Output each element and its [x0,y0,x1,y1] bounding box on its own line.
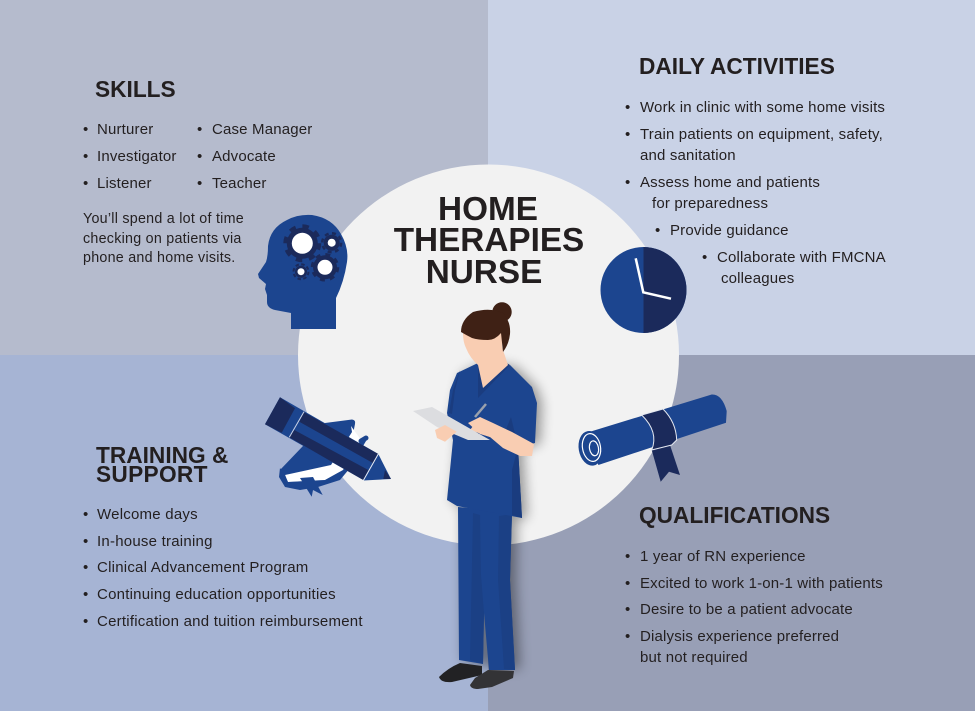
icon: clock [600,247,686,333]
training list: Welcome days [97,506,198,523]
title: NURSE [426,254,542,291]
training list: • [83,613,88,630]
title [394,191,584,291]
qualifications list: 1 year of RN experience [640,548,806,565]
panel: training background [0,355,488,711]
daily activities list [625,99,886,287]
book lower cover [279,440,366,490]
qualifications list: • [625,575,630,592]
training list: • [83,559,88,576]
training list: • [83,533,88,550]
heading: training and support: TRAINING & [96,442,228,468]
daily activities list: Provide guidance [670,222,789,239]
training list: Certification and tuition reimbursement [97,613,363,630]
qualifications list: • [625,628,630,645]
skills description [83,211,244,266]
skills list: Teacher [212,175,267,192]
panel: qualifications background [488,355,975,711]
arm [470,417,534,456]
training list: Continuing education opportunities [97,586,336,603]
panel: daily activities background [488,0,975,355]
qualifications list: • [625,548,630,565]
skills list: • [197,148,202,165]
skills list: Case Manager [212,121,312,138]
skills list: • [83,121,88,138]
daily activities list: • [655,222,660,239]
skills list: Investigator [97,148,177,165]
book ribbon [300,477,323,497]
skills list: Nurturer [97,121,153,138]
clipboard [413,407,490,440]
title: HOME [438,191,538,228]
icon: head with gears [258,215,347,329]
qualifications list: • [625,601,630,618]
daily activities list: • [625,174,630,191]
daily activities list: Collaborate with FMCNA [717,249,886,266]
book bookmark tip [361,438,366,441]
daily activities list: Train patients on equipment, safety, [640,126,883,143]
training list: In-house training [97,533,213,550]
qualifications list [625,548,883,666]
daily activities list: Assess home and patients [640,174,820,191]
daily activities list: colleagues [721,270,794,287]
panel text: daily activities [625,53,886,287]
skills list: Advocate [212,148,276,165]
skills list: Listener [97,175,152,192]
daily activities list: • [625,126,630,143]
skills list: • [197,175,202,192]
center circle [298,164,679,546]
nurse shadow [452,364,542,669]
daily activities list: for preparedness [652,195,768,212]
skills description: checking on patients via [83,231,242,247]
heading: qualifications: QUALIFICATIONS [639,502,830,528]
writing hand [468,417,490,437]
icon: book and pencil [265,397,391,497]
daily activities list: Work in clinic with some home visits [640,99,885,116]
skills list: • [197,121,202,138]
skills description: You’ll spend a lot of time [83,211,244,227]
scrub top [447,362,537,518]
training list: • [83,586,88,603]
training list [83,506,363,630]
icon: diploma scroll [576,394,727,482]
hair [461,302,512,352]
neck and face [463,325,508,388]
skills list: • [83,148,88,165]
qualifications list: but not required [640,649,748,666]
panel text: qualifications [625,502,883,666]
trousers [458,507,515,670]
heading: training and support: SUPPORT [96,461,208,487]
skills list [83,121,312,192]
panel text: training and support [83,442,363,630]
panel text: skills [83,76,312,266]
panel: skills background [0,0,488,355]
training list: Clinical Advancement Program [97,559,309,576]
shoes [439,663,514,689]
book cover [280,420,355,477]
qualifications list: Desire to be a patient advocate [640,601,853,618]
title: THERAPIES [394,222,584,259]
daily activities list: and sanitation [640,147,736,164]
heading: daily activities: DAILY ACTIVITIES [639,53,835,79]
nurse figure [413,302,542,689]
daily activities list: • [625,99,630,116]
skills list: • [83,175,88,192]
book pages [285,426,361,482]
qualifications list: Dialysis experience preferred [640,628,839,645]
left hand [435,425,457,442]
daily activities list: • [702,249,707,266]
pen [475,404,486,417]
pencil body [265,397,378,480]
qualifications list: Excited to work 1-on-1 with patients [640,575,883,592]
skills description: phone and home visits. [83,250,236,266]
heading: training and support [96,442,228,487]
heading: skills: SKILLS [95,76,176,102]
training list: • [83,506,88,523]
